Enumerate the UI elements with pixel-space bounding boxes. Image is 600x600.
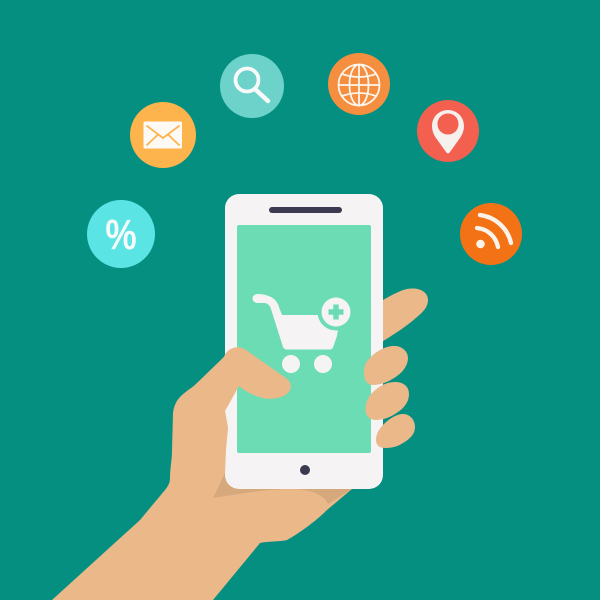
plus badge — [318, 294, 354, 330]
icon: percent badge — [87, 200, 155, 268]
icon: globe badge — [328, 53, 390, 115]
arm and palm — [52, 347, 352, 600]
icon: search badge — [220, 54, 284, 118]
icon: mail badge — [130, 102, 196, 168]
phone home button — [300, 465, 310, 475]
phone — [225, 194, 383, 489]
phone screen — [237, 225, 371, 453]
finger: little — [376, 414, 415, 448]
finger: ring — [365, 382, 409, 420]
thumb over phone — [200, 347, 291, 470]
icon: location pin badge — [417, 100, 479, 162]
icon: shopping cart — [252, 294, 354, 373]
phone body — [225, 194, 383, 489]
icon: rss badge — [460, 203, 522, 265]
phone speaker — [269, 207, 342, 213]
icon: percent badge: % — [105, 211, 137, 259]
index finger behind phone — [375, 288, 428, 346]
shadow under phone — [213, 470, 352, 504]
thumb base over phone edge — [190, 411, 228, 498]
finger: middle — [364, 346, 408, 385]
